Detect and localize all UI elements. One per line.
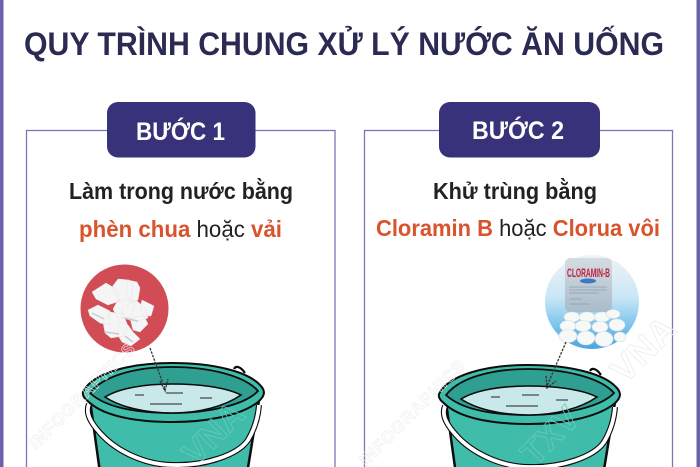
watermark centre: INFOGRAPHICS <box>355 356 469 467</box>
arrow: alum into bucket <box>150 348 168 391</box>
badge label: step 1: BƯỚC 1 <box>136 116 225 146</box>
panel frame: step 1 <box>26 130 335 467</box>
panel: step 1 <box>26 102 335 467</box>
icon: Cloramin-B product photo: CLORAMIN-B <box>567 268 610 280</box>
watermark left: INFOGRAPHICS <box>25 339 139 453</box>
icon: bucket of water <box>439 365 620 467</box>
watermark right: VNA <box>602 308 684 391</box>
arrow: Cloramin into bucket <box>546 342 566 388</box>
materials line: step 2: Cloramin B hoặc Clorua vôi <box>376 215 660 241</box>
heading line: step 2: Khử trùng bằng <box>433 177 597 204</box>
badge: step 1 <box>107 102 256 158</box>
panel frame: step 2 <box>364 130 672 467</box>
badge: step 2 <box>439 102 600 158</box>
title: QUY TRÌNH CHUNG XỬ LÝ NƯỚC ĂN UỐNG <box>24 24 664 62</box>
panel: step 2 <box>364 102 672 467</box>
materials line: step 1: phèn chua hoặc vải <box>79 216 282 242</box>
right page border <box>696 0 700 467</box>
icon: Cloramin-B product photo <box>545 255 639 349</box>
heading line: step 1: Làm trong nước bằng <box>69 177 293 204</box>
left page border <box>0 0 4 467</box>
badge label: step 2: BƯỚC 2 <box>472 115 564 145</box>
icon: bucket of water <box>83 363 264 467</box>
icon: alum crystals <box>80 264 168 352</box>
